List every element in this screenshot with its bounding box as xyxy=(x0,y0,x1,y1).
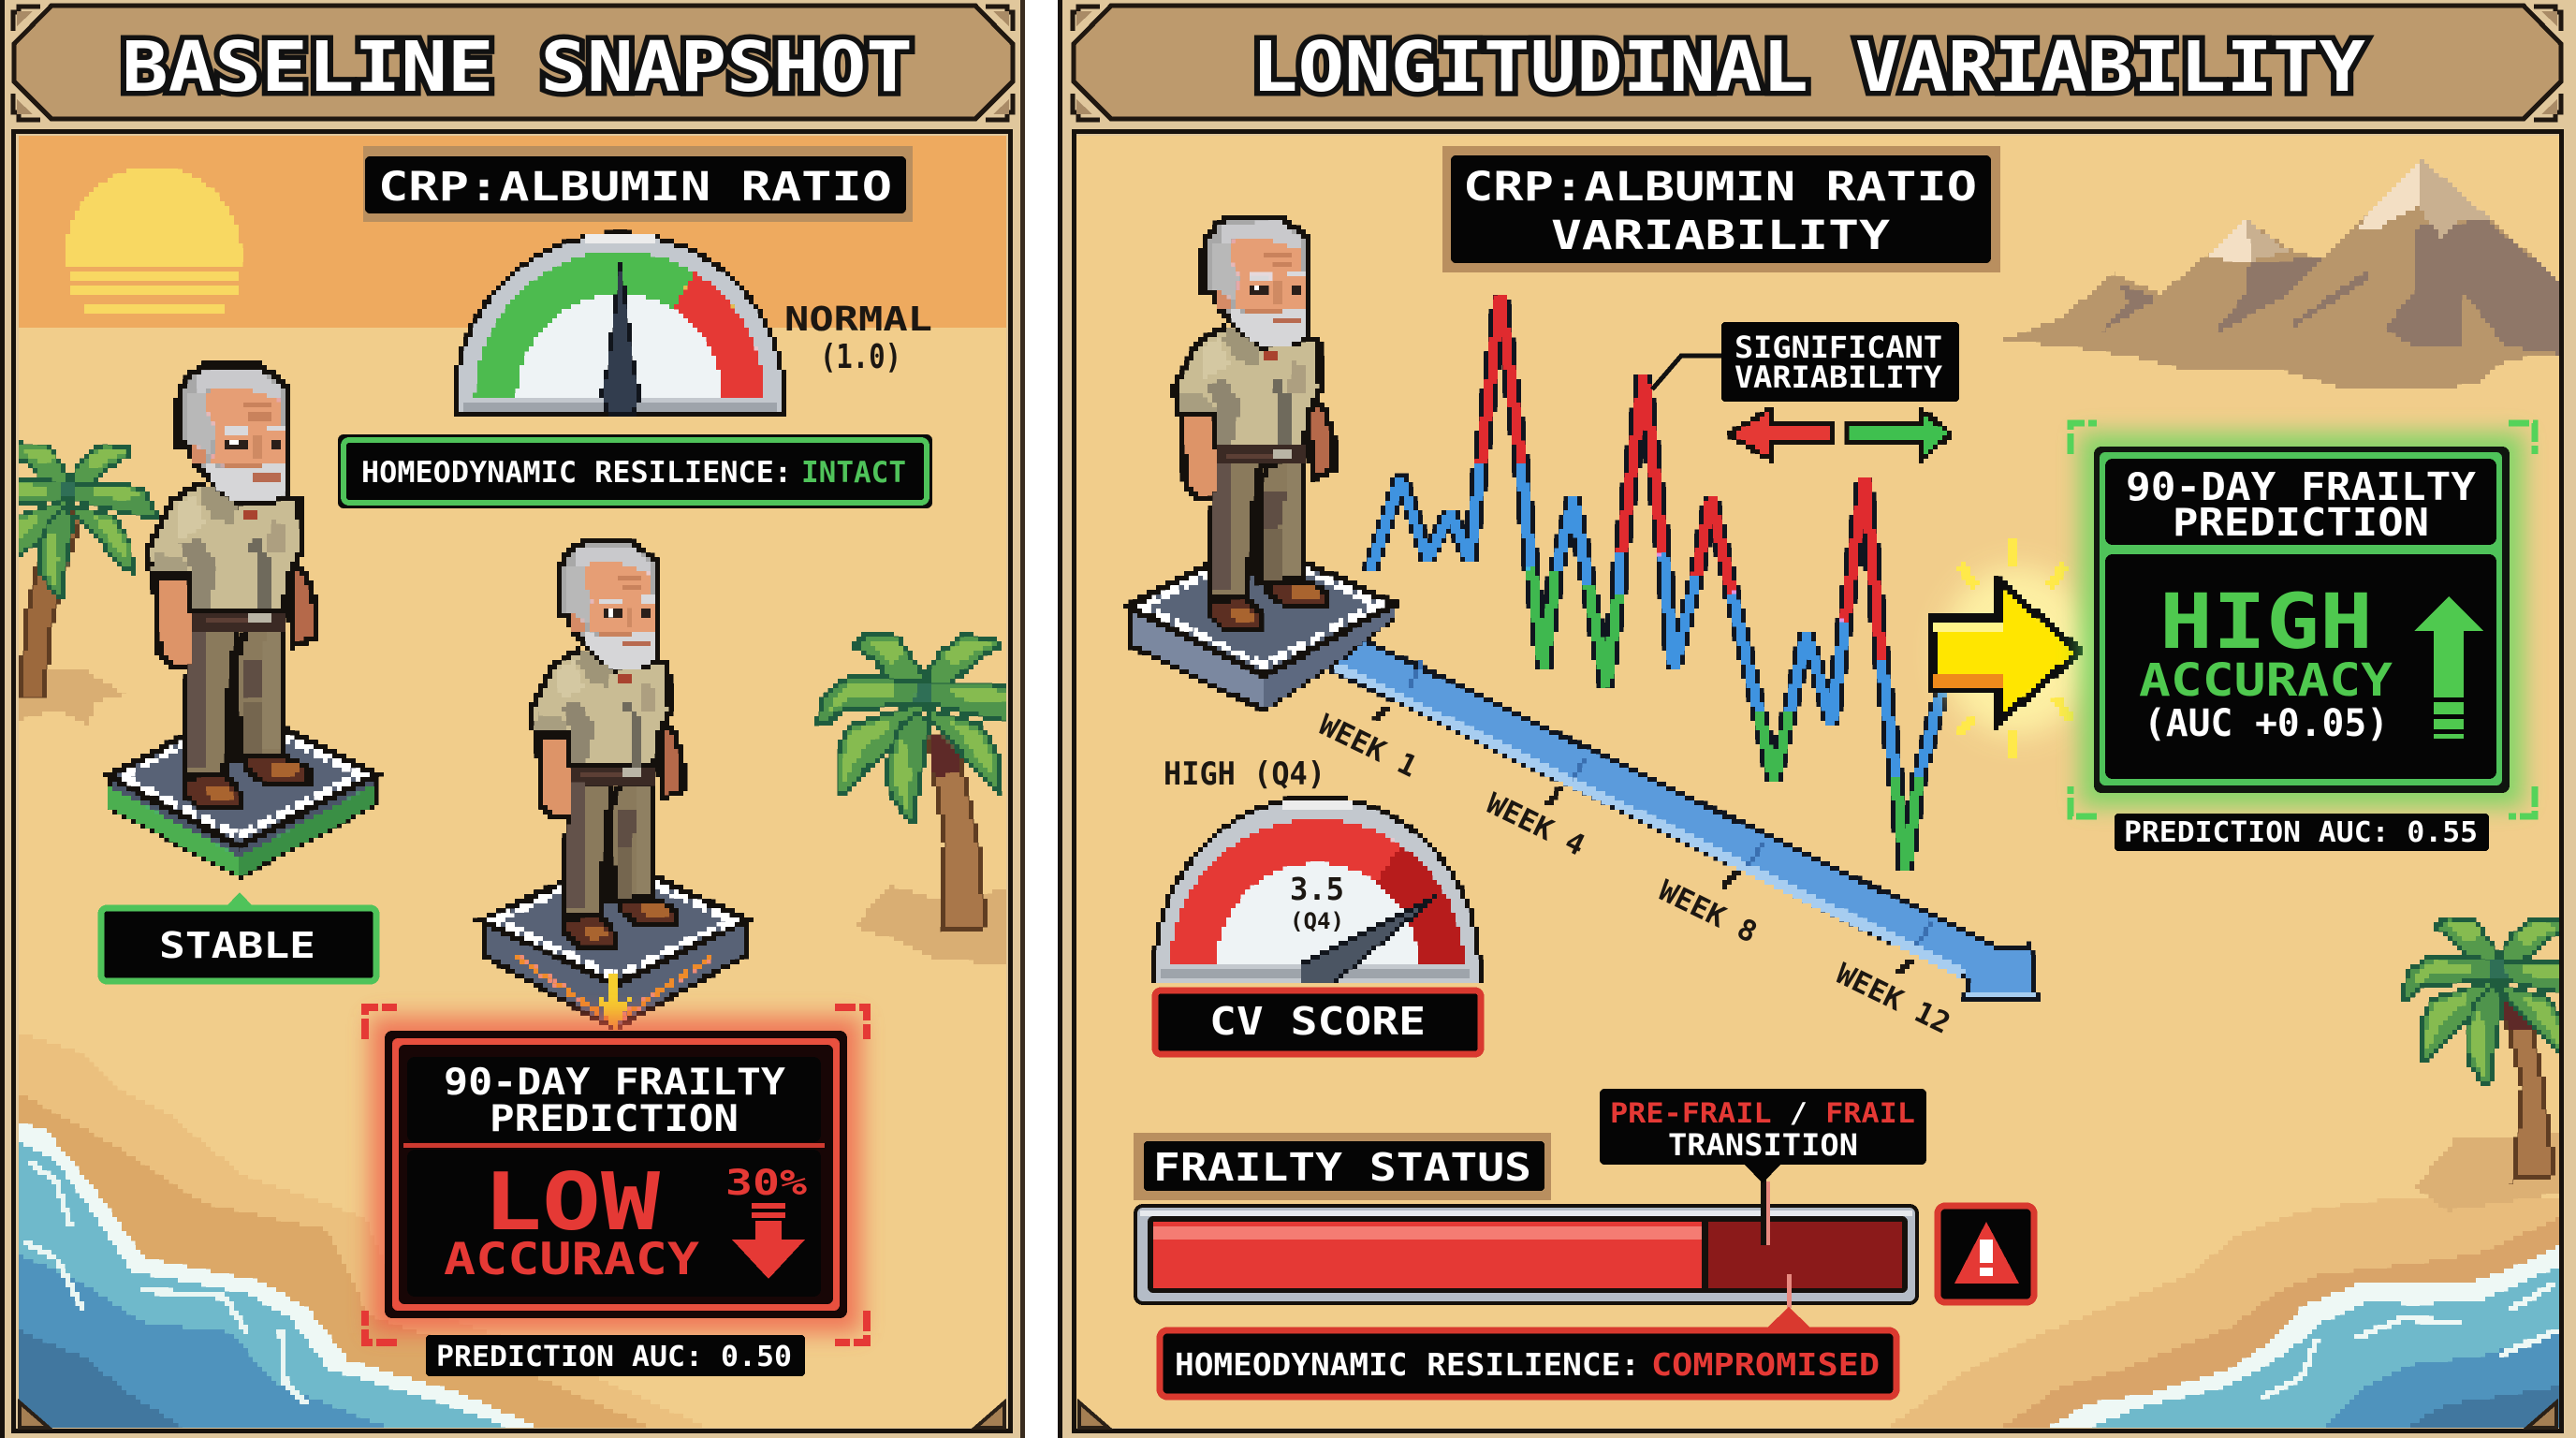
panel: low accuracy prediction: PREDICTION xyxy=(490,1098,739,1140)
gauge value label: NORMAL xyxy=(784,301,932,339)
title: LONGITUDINAL VARIABILITY xyxy=(1251,27,2365,108)
arrow: timeline with weeks: WEEK 4 xyxy=(1481,786,1590,863)
arrow: timeline with weeks: WEEK 12 xyxy=(1831,957,1955,1041)
arrow: red left xyxy=(1729,408,1834,461)
panel: high accuracy prediction: 90-DAY FRAILTY xyxy=(2126,464,2476,509)
panel: high accuracy prediction: (AUC +0.05) xyxy=(2144,702,2389,745)
label: high Q4: HIGH (Q4) xyxy=(1164,756,1325,793)
panel corner ornaments xyxy=(20,1402,1004,1428)
label: CRP albumin ratio variability: VARIABILITY xyxy=(1551,213,1890,259)
icon: left palm tree xyxy=(0,444,157,726)
label: CRP albumin ratio xyxy=(363,146,913,222)
panel: longitudinal variability xyxy=(1058,0,2576,1438)
status: resilience compromised xyxy=(1160,1274,1896,1397)
callout: significant variability: SIGNIFICANT xyxy=(1734,330,1942,365)
callout: pre-frail to frail transition: PRE-FRAIL / FRAIL xyxy=(1610,1097,1915,1129)
character: older man xyxy=(531,542,682,946)
label: prediction AUC 0.50: PREDICTION AUC: 0.50 xyxy=(436,1341,792,1373)
status: resilience compromised: HOMEODYNAMIC RESILIENCE: xyxy=(1175,1346,1640,1383)
status: resilience intact xyxy=(338,434,932,508)
arrow: green right xyxy=(1849,408,1951,461)
figure: patient on platform with timeline xyxy=(1129,217,1394,710)
gauge value label: (1.0) xyxy=(820,338,901,376)
arrow: timeline with weeks: WEEK 8 xyxy=(1653,873,1763,950)
callout: significant variability: VARIABILITY xyxy=(1734,360,1943,395)
heading banner: longitudinal variability xyxy=(1073,6,2561,120)
gauge: CV score xyxy=(1152,795,1482,985)
character: older man xyxy=(147,365,315,808)
panel: high accuracy prediction: PREDICTION xyxy=(2173,500,2429,545)
panel: low accuracy prediction: LOW xyxy=(483,1156,661,1249)
figure: stable patient on platform xyxy=(109,365,374,876)
icon: up arrow xyxy=(2414,596,2483,739)
label: frailty status: FRAILTY STATUS xyxy=(1153,1145,1531,1190)
icon: mountains xyxy=(2002,158,2559,389)
panel: low accuracy prediction: 30% xyxy=(725,1163,808,1203)
label: CRP albumin ratio variability xyxy=(1442,146,2000,272)
arrow: yellow to prediction xyxy=(1933,538,2092,760)
panel: low accuracy prediction: 90-DAY FRAILTY xyxy=(444,1062,786,1104)
panel: high accuracy prediction: HIGH xyxy=(2159,579,2373,667)
label: CV score: CV SCORE xyxy=(1209,999,1426,1044)
callout: pre-frail to frail transition: TRANSITION xyxy=(1668,1127,1858,1163)
panel corner ornaments xyxy=(1079,1402,2556,1428)
label: stable: STABLE xyxy=(159,925,315,966)
panel: high accuracy prediction xyxy=(2071,423,2535,816)
title: BASELINE SNAPSHOT xyxy=(122,27,913,108)
panel: high accuracy prediction: ACCURACY xyxy=(2139,654,2393,707)
character: older man xyxy=(1174,217,1334,629)
panel: baseline snapshot xyxy=(0,0,1032,1438)
gauge value label xyxy=(784,301,932,376)
label: stable xyxy=(101,892,376,981)
icon: down arrow xyxy=(732,1203,805,1279)
platform: grey xyxy=(1129,540,1394,710)
background: beach scene xyxy=(0,134,1032,1430)
status: resilience compromised: COMPROMISED xyxy=(1651,1346,1880,1383)
status: resilience intact: HOMEODYNAMIC RESILIENCE: xyxy=(361,456,792,490)
label: CRP albumin ratio: CRP:ALBUMIN RATIO xyxy=(378,164,892,211)
background: sand scene xyxy=(1076,134,2576,1430)
arrow: timeline with weeks xyxy=(1313,640,2037,1041)
heading banner: baseline snapshot xyxy=(13,6,1013,120)
arrow: timeline with weeks: WEEK 1 xyxy=(1313,708,1423,785)
panel: low accuracy prediction xyxy=(365,1007,867,1343)
icon: right palm tree xyxy=(814,632,1006,964)
label: CV score xyxy=(1155,990,1481,1054)
status bar: frailty xyxy=(1135,1206,1917,1303)
callout: pre-frail to frail transition xyxy=(1600,1089,1926,1245)
callout: significant variability xyxy=(1652,322,1959,402)
gauge: CV score: (Q4) xyxy=(1290,908,1344,934)
label: CRP albumin ratio variability: CRP:ALBUMIN RATIO xyxy=(1463,164,1977,211)
line chart: CRP albumin variability over time xyxy=(1370,296,1942,871)
figure: unstable patient on platform xyxy=(483,542,746,1034)
gauge: normal CRP albumin xyxy=(452,231,932,418)
icon: warning xyxy=(1938,1206,2034,1302)
label: frailty status xyxy=(1134,1133,1551,1200)
status: resilience intact: INTACT xyxy=(801,456,906,490)
platform: stable xyxy=(109,709,374,876)
label: prediction AUC 0.55: PREDICTION AUC: 0.55 xyxy=(2124,816,2478,849)
platform: unstable xyxy=(483,859,746,1034)
panel: low accuracy prediction: ACCURACY xyxy=(444,1234,700,1285)
icon: palm tree xyxy=(2402,917,2576,1211)
gauge: CV score: 3.5 xyxy=(1290,871,1344,907)
